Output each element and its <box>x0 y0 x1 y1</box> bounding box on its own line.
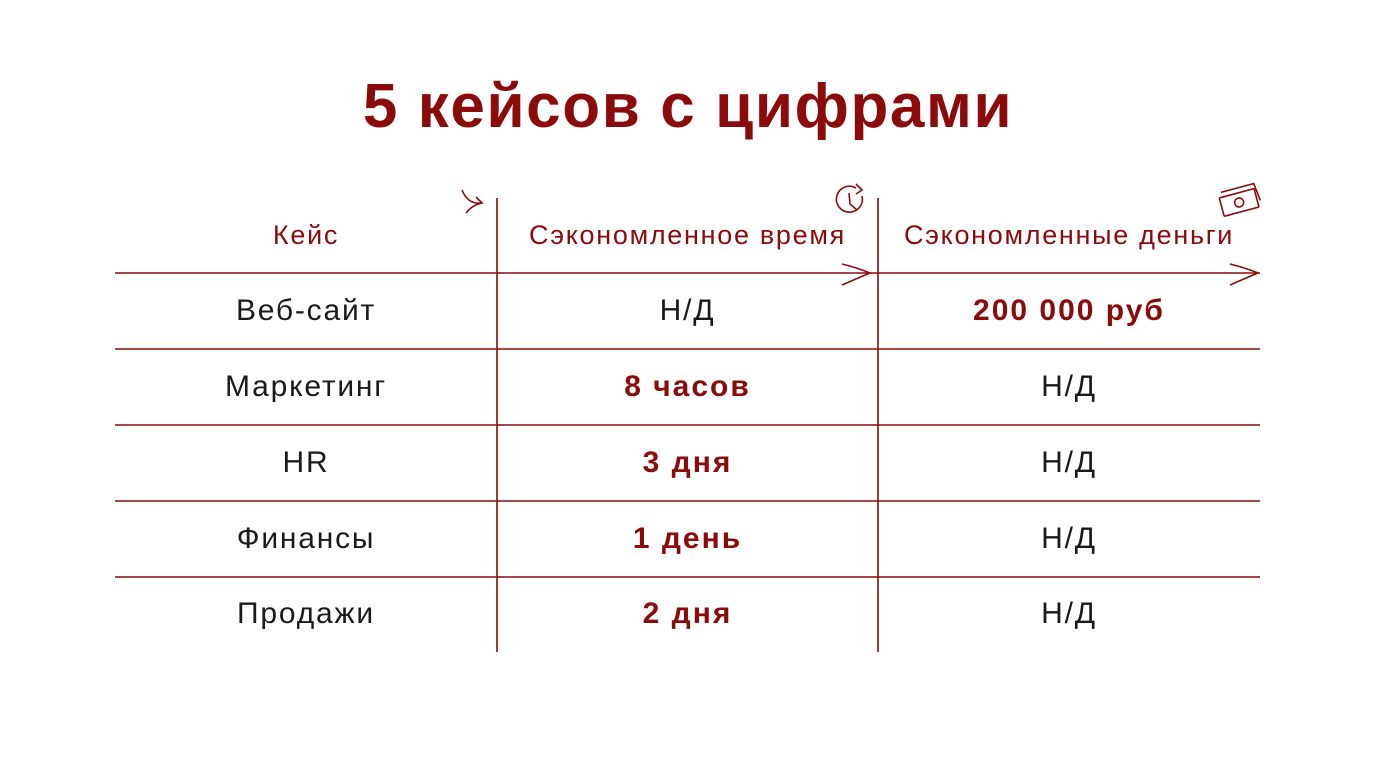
text: Н/Д <box>1041 446 1097 479</box>
title: 5 кейсов с цифрами <box>363 72 1013 141</box>
header: money: Сэкономленные деньги <box>904 220 1234 250</box>
text: 1 день <box>633 522 742 555</box>
icon: money <box>1218 183 1262 216</box>
text: 200 000 руб <box>973 294 1165 327</box>
text: Н/Д <box>1041 370 1097 403</box>
row: HR: HR <box>283 446 329 479</box>
row: sales: Продажи <box>237 597 375 630</box>
text: Н/Д <box>660 294 715 327</box>
text: 8 часов <box>624 370 751 403</box>
row: marketing: Маркетинг <box>225 370 387 403</box>
header: case: Кейс <box>273 220 339 250</box>
text: Н/Д <box>1041 522 1097 555</box>
header: time: Сэкономленное время <box>529 220 846 250</box>
text: Н/Д <box>1041 597 1097 630</box>
row: website: Веб-сайт <box>236 294 376 327</box>
icon: clock <box>836 184 862 212</box>
text: 2 дня <box>643 597 732 630</box>
text: 3 дня <box>643 446 732 479</box>
row: finance: Финансы <box>237 522 375 555</box>
